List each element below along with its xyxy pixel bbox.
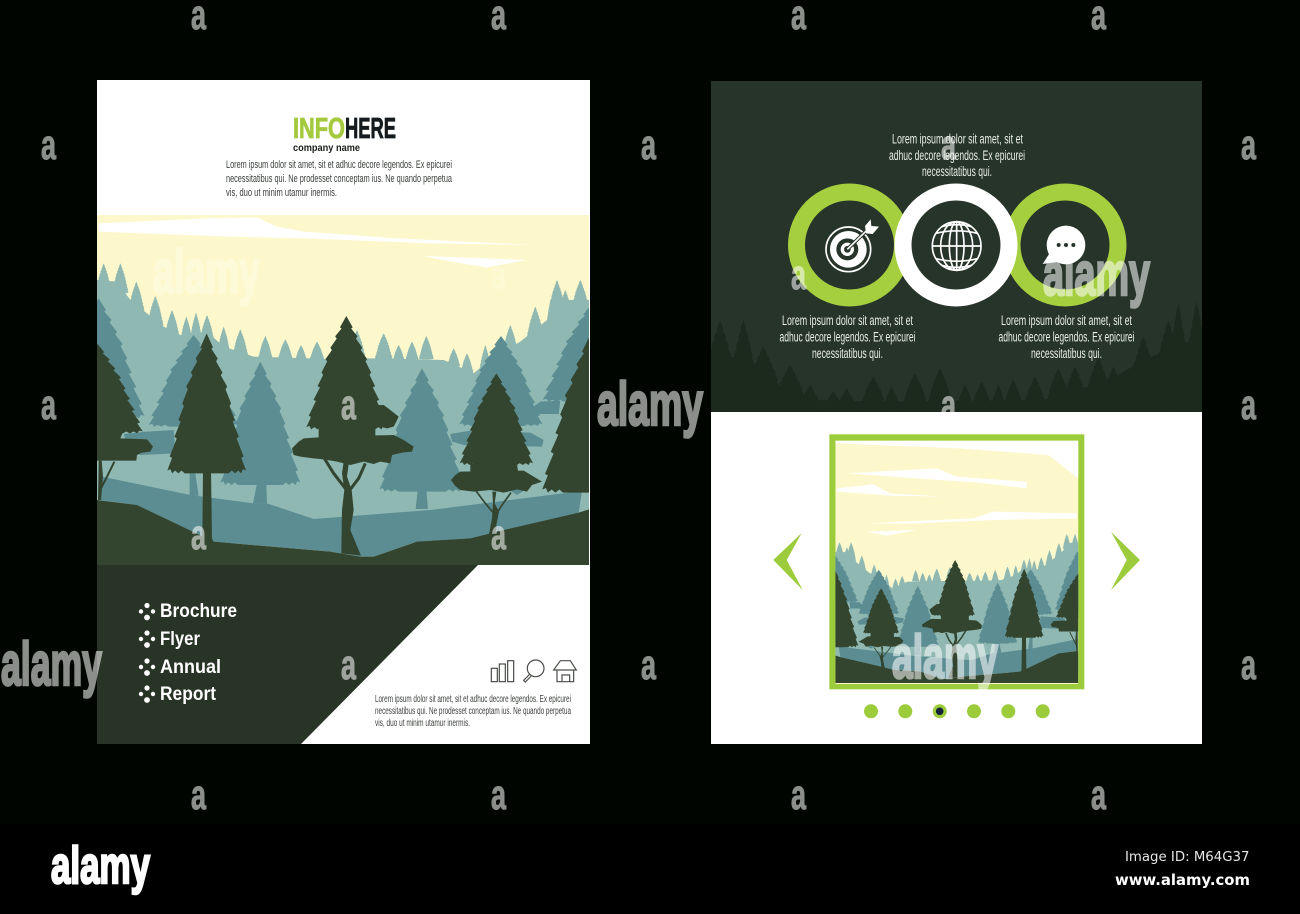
watermarks: a	[191, 771, 206, 818]
watermarks: a	[191, 511, 206, 558]
watermarks: a	[341, 641, 356, 688]
panel: brochure front cover	[51, 80, 639, 744]
footer band	[0, 824, 1300, 914]
watermarks: a	[41, 381, 56, 428]
icon: magnifier	[524, 660, 544, 682]
icons: chart, search, house	[491, 660, 576, 682]
illustration: forest landscape	[51, 215, 639, 565]
text: left: necessitatibus qui.	[812, 346, 883, 361]
watermarks: a	[941, 381, 956, 428]
intro text: vis, duo ut minim utamur inermis.	[226, 187, 337, 199]
watermarks: a	[791, 771, 806, 818]
pagination dots	[864, 704, 1050, 718]
ring: globe	[903, 192, 1009, 298]
text: top: Lorem ipsum dolor sit amet, sit et	[892, 132, 1023, 146]
footer text: Lorem ipsum dolor sit amet, sit et adhuc decore legendos. Ex epicurei	[375, 694, 571, 705]
watermarks: alamy	[1, 630, 102, 698]
footer logo: alamy	[51, 837, 150, 895]
watermarks: a	[941, 121, 956, 168]
title: HERE	[345, 113, 396, 145]
text: left: Lorem ipsum dolor sit amet, sit et	[782, 313, 913, 328]
list item: Brochure: Brochure	[160, 601, 237, 622]
text: top: adhuc decore legendos. Ex epicurei	[889, 148, 1025, 163]
intro text: necessitatibus qui. Ne prodesset conceptam ius. Ne quando perpetua	[226, 173, 453, 185]
title	[293, 113, 396, 145]
watermarks: alamy	[597, 370, 703, 438]
title: INFO	[293, 113, 345, 145]
watermarks: a	[791, 251, 806, 298]
icon: globe	[932, 222, 981, 270]
text: right: necessitatibus qui.	[1031, 346, 1102, 361]
text: right: Lorem ipsum dolor sit amet, sit et	[1001, 313, 1132, 328]
text: right: adhuc decore legendos. Ex epicurei	[998, 330, 1134, 344]
footer text: vis, duo ut minim utamur inermis.	[375, 718, 470, 729]
watermarks: a	[491, 251, 506, 298]
watermarks: a	[641, 121, 656, 168]
arrow: previous	[773, 533, 803, 590]
icon: house	[554, 661, 576, 682]
framed picture	[829, 434, 1084, 690]
list: document types	[139, 601, 237, 705]
list item: Flyer: Flyer	[160, 629, 201, 650]
watermarks: a	[41, 121, 56, 168]
watermarks: a	[1241, 381, 1256, 428]
watermarks: alamy	[153, 238, 260, 306]
text: right	[998, 313, 1134, 361]
icon: bar chart	[491, 661, 514, 682]
icon: target	[826, 219, 879, 272]
watermarks: a	[1091, 771, 1106, 818]
intro text: Lorem ipsum dolor sit amet, sit et adhuc decore legendos. Ex epicurei	[226, 159, 452, 171]
forest silhouette	[698, 302, 1213, 413]
text: left	[780, 313, 916, 361]
watermarks: a	[491, 771, 506, 818]
footer image id: Image ID: M64G37	[1125, 850, 1250, 865]
watermarks: alamy	[1043, 240, 1150, 308]
dark diagonal panel	[97, 565, 478, 744]
watermarks: alamy	[892, 623, 998, 691]
footer text: necessitatibus qui. Ne prodesset conceptam ius. Ne quando perpetua	[375, 706, 571, 717]
list item: Annual: Annual	[160, 657, 221, 678]
ring: target	[796, 192, 902, 298]
icon: speech bubble	[1043, 226, 1085, 264]
watermarks: a	[1241, 121, 1256, 168]
ring: chat	[1012, 192, 1118, 298]
arrow: next	[1111, 532, 1140, 590]
watermarks: a	[341, 381, 356, 428]
footer text	[375, 694, 571, 729]
panel: brochure back cover	[698, 81, 1213, 744]
company name: company name	[293, 143, 360, 154]
text: top: necessitatibus qui.	[922, 164, 992, 179]
footer url: www.alamy.com	[1115, 871, 1250, 889]
intro text	[226, 159, 453, 199]
list item: Report: Report	[160, 684, 217, 705]
watermarks: a	[641, 641, 656, 688]
watermarks: a	[1241, 641, 1256, 688]
text: top	[889, 132, 1025, 179]
watermarks: a	[491, 511, 506, 558]
text: left: adhuc decore legendos. Ex epicurei	[780, 330, 916, 344]
dark header panel	[711, 81, 1202, 412]
